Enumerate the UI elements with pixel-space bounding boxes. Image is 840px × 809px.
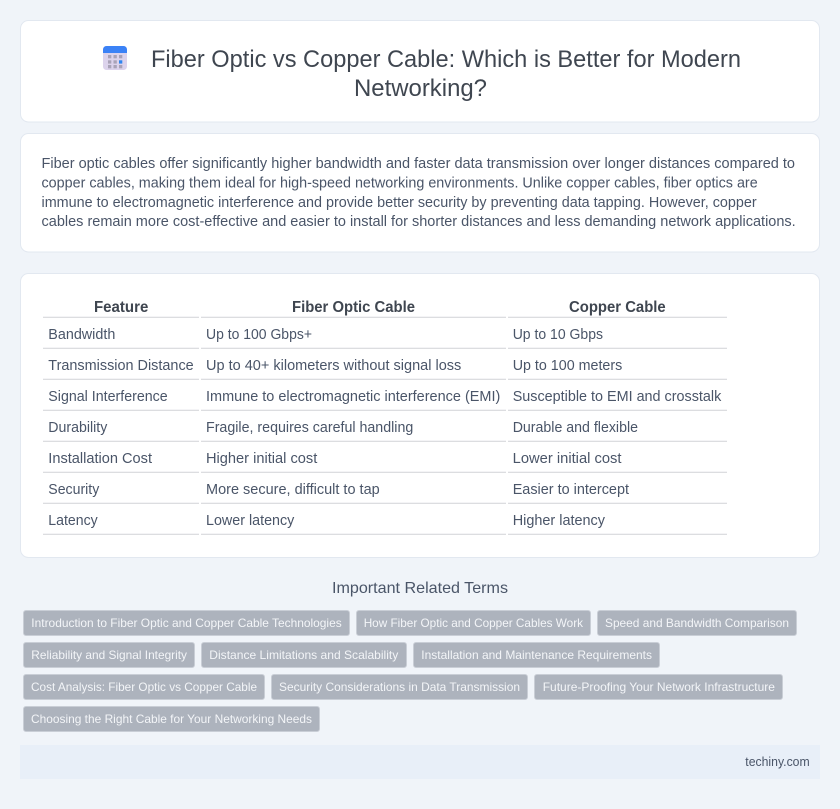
table header: Copper Cable — [569, 299, 666, 316]
row: bandwidth — [48, 327, 603, 343]
footer: techiny.com — [745, 754, 810, 769]
tag — [24, 642, 194, 668]
row: installation cost: Installation Cost — [48, 451, 152, 467]
tag: Cost Analysis: Fiber Optic vs Copper Cable — [31, 680, 257, 694]
title: Fiber Optic vs Copper Cable: Which is Better for Modern — [151, 46, 741, 73]
row: signal interference — [48, 389, 722, 405]
tag: Distance Limitations and Scalability — [209, 648, 398, 662]
row: durability: Durable and flexible — [513, 420, 638, 436]
summary text: copper cables, making them ideal for high-speed networking environments. Unlike copper cables, fiber optics are — [42, 176, 758, 192]
row: latency — [48, 513, 606, 529]
row: installation cost: Higher initial cost — [206, 451, 317, 467]
tag — [598, 610, 796, 636]
row: installation cost: Lower initial cost — [513, 451, 622, 467]
table header — [94, 299, 666, 316]
row: latency: Lower latency — [206, 513, 295, 529]
tag: Future-Proofing Your Network Infrastructure — [543, 680, 775, 694]
row: bandwidth: Bandwidth — [48, 327, 115, 343]
title — [151, 46, 741, 102]
related term tags — [24, 610, 796, 732]
footer — [20, 745, 820, 779]
row: security: More secure, difficult to tap — [206, 482, 380, 498]
row: security: Easier to intercept — [513, 482, 629, 498]
tag: Choosing the Right Cable for Your Networking Needs — [31, 712, 312, 726]
row: latency: Higher latency — [513, 513, 606, 529]
panel: comparison table — [20, 274, 820, 558]
row: transmission distance: Transmission Distance — [48, 358, 194, 374]
row: latency: Latency — [48, 513, 98, 529]
row: security: Security — [48, 482, 100, 498]
row: bandwidth: Up to 10 Gbps — [513, 327, 603, 343]
heading: related terms: Important Related Terms — [332, 580, 508, 597]
summary text: cables remain more cost-effective and easier to install for shorter distances and less demanding network applications. — [42, 214, 796, 230]
panel: header — [20, 20, 820, 122]
table header: Fiber Optic Cable — [292, 299, 415, 316]
icon: calendar grid — [103, 46, 127, 70]
tag: Introduction to Fiber Optic and Copper Cable Technologies — [31, 616, 342, 630]
tag: How Fiber Optic and Copper Cables Work — [364, 616, 584, 630]
tag — [202, 642, 406, 668]
tag — [414, 642, 660, 668]
tag — [356, 610, 590, 636]
row: durability — [48, 420, 638, 436]
row: bandwidth: Up to 100 Gbps+ — [206, 327, 312, 343]
row: transmission distance: Up to 100 meters — [513, 358, 622, 374]
row: signal interference: Susceptible to EMI and crosstalk — [513, 389, 722, 405]
tag — [534, 674, 782, 700]
title: Networking? — [354, 75, 487, 102]
table header: Feature — [94, 299, 148, 316]
tag: Installation and Maintenance Requirements — [421, 648, 652, 662]
row: transmission distance: Up to 40+ kilometers without signal loss — [206, 358, 461, 374]
summary text: Fiber optic cables offer significantly higher bandwidth and faster data transmission over longer distances compared to — [42, 156, 795, 172]
tag: Security Considerations in Data Transmission — [279, 680, 520, 694]
row: durability: Fragile, requires careful handling — [206, 420, 413, 436]
tag — [24, 706, 320, 732]
summary text: immune to electromagnetic interference and provide better security by preventing data tapping. However, copper — [42, 195, 757, 211]
panel: summary — [20, 134, 820, 252]
tag — [272, 674, 528, 700]
row: installation cost — [48, 451, 622, 467]
row: transmission distance — [48, 358, 622, 374]
tag — [24, 674, 264, 700]
summary text — [42, 156, 796, 230]
tag — [24, 610, 350, 636]
row: security — [48, 482, 629, 498]
tag: Reliability and Signal Integrity — [31, 648, 187, 662]
row: durability: Durability — [48, 420, 108, 436]
row: signal interference: Immune to electromagnetic interference (EMI) — [206, 389, 500, 405]
row: signal interference: Signal Interference — [48, 389, 168, 405]
tag: Speed and Bandwidth Comparison — [605, 616, 789, 630]
